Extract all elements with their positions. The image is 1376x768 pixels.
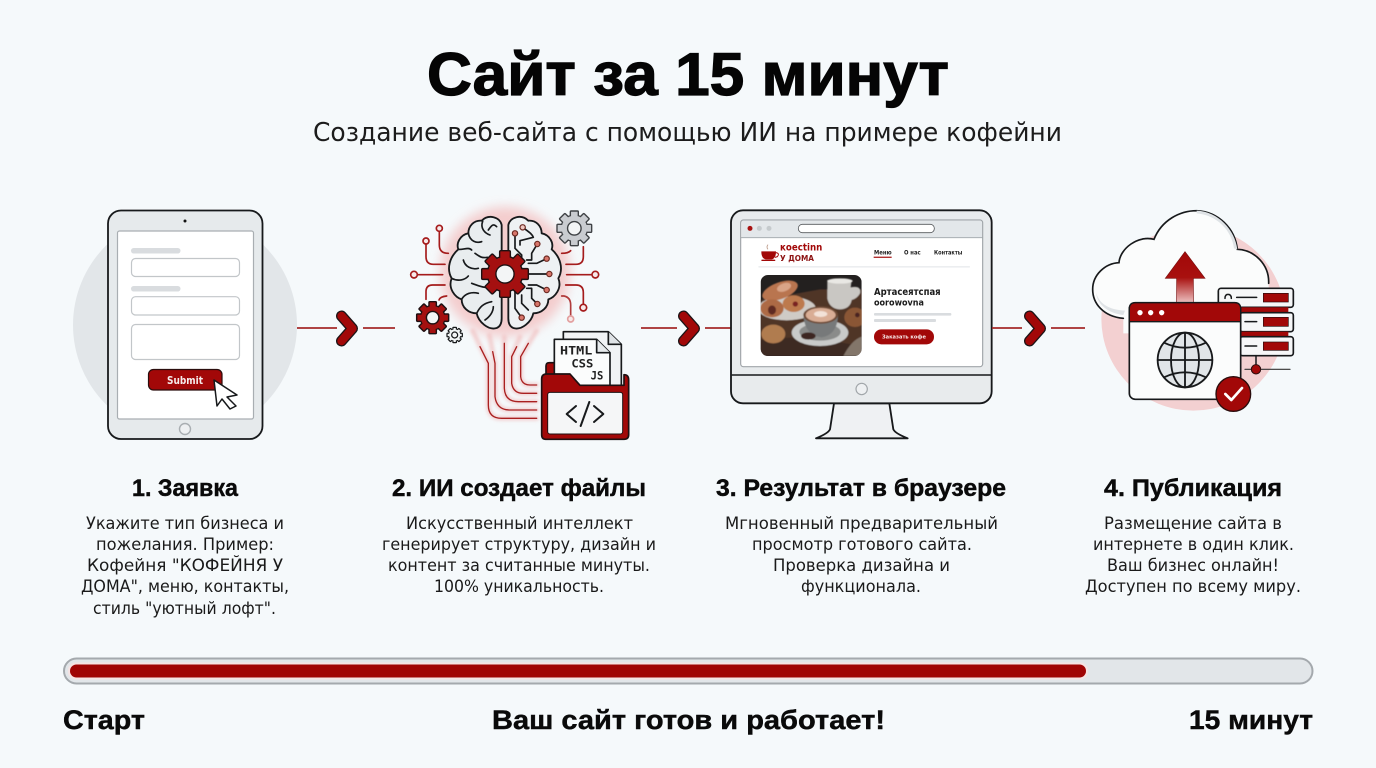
site navigation: О нас xyxy=(904,249,921,256)
brain glow xyxy=(440,207,570,337)
label: start: Старт xyxy=(63,705,145,735)
front document xyxy=(554,339,610,390)
progress bar xyxy=(64,658,1312,684)
arrow 1 xyxy=(297,316,395,341)
site headline: ооrоwоvnа xyxy=(874,298,924,308)
step 4 description: интернете в один клик. xyxy=(1093,535,1294,554)
browser window xyxy=(741,220,983,367)
file labels xyxy=(560,343,603,383)
file labels: JS xyxy=(591,369,603,383)
step 2 description xyxy=(382,514,656,596)
site navigation: Меню xyxy=(874,249,892,256)
gray gear xyxy=(557,211,592,246)
step 1 description: Укажите тип бизнеса и xyxy=(86,514,284,533)
step 1 description: ДОМА", меню, контакты, xyxy=(81,577,289,596)
title: Сайт за 15 минут xyxy=(427,41,949,108)
site logo: У ДОМА xyxy=(780,253,814,263)
arrow 3 xyxy=(992,316,1085,341)
icon: AI brain generating files xyxy=(411,207,629,439)
step 1 description xyxy=(81,514,289,618)
icon: tablet with form xyxy=(73,210,297,439)
step 4 description xyxy=(1085,514,1301,596)
step 4 description: Ваш бизнес онлайн! xyxy=(1107,556,1279,575)
step 2 description: 100% уникальность. xyxy=(434,577,604,596)
red gear xyxy=(417,302,449,334)
arrow 2 xyxy=(641,316,732,341)
back document xyxy=(563,332,621,390)
step 3 description xyxy=(725,514,998,596)
small outline gear xyxy=(447,327,462,343)
site button: Заказать кофе xyxy=(882,334,926,341)
step 3 description: Мгновенный предварительный xyxy=(725,514,998,533)
step 1 description: пожелания. Пример: xyxy=(96,535,274,554)
monitor stand xyxy=(816,403,908,438)
site navigation: Контакты xyxy=(934,249,963,256)
folder with code files xyxy=(542,332,629,439)
site headline: Артасеятспая xyxy=(874,287,941,298)
cloud xyxy=(1093,211,1269,333)
center gear xyxy=(482,251,528,297)
step 3 description: Проверка дизайна и xyxy=(773,556,950,575)
subtitle: Создание веб-сайта с помощью ИИ на примере кофейни xyxy=(313,118,1062,148)
step 2 heading: 2. ИИ создает файлы xyxy=(392,475,646,502)
left circuits xyxy=(411,225,448,300)
step 3 heading: 3. Результат в браузере xyxy=(716,475,1006,502)
icon: cursor xyxy=(214,380,237,409)
right circuits xyxy=(562,247,599,322)
folder front xyxy=(542,374,629,439)
site headline xyxy=(874,287,941,308)
browser window xyxy=(1129,303,1241,399)
step 1 description: Кофейня "КОФЕЙНЯ У xyxy=(87,556,283,575)
submit button xyxy=(148,370,222,390)
step 4 description: Размещение сайта в xyxy=(1104,514,1282,533)
site button xyxy=(874,329,934,344)
check badge xyxy=(1216,377,1251,411)
monitor body xyxy=(731,210,992,403)
step 3 description: функционала. xyxy=(801,577,921,596)
step 2 description: контент за считанные минуты. xyxy=(388,556,650,575)
globe xyxy=(1158,333,1212,387)
data streams xyxy=(473,331,537,418)
coffee and pastry photo xyxy=(758,275,866,356)
step 4 heading: 4. Публикация xyxy=(1104,475,1282,502)
site logo xyxy=(761,243,822,263)
step 4 description: Доступен по всему миру. xyxy=(1085,577,1301,596)
step 2 description: Искусственный интеллект xyxy=(406,514,633,533)
step 3 description: просмотр готового сайта. xyxy=(752,535,972,554)
site navigation xyxy=(874,249,963,258)
server stack xyxy=(1218,288,1293,374)
step 1 description: стиль "уютный лофт". xyxy=(93,599,276,618)
step 2 description: генерирует структуру, дизайн и xyxy=(382,535,656,554)
site logo: коеctinn xyxy=(780,243,822,254)
label: 15 minutes: 15 минут xyxy=(1189,705,1313,735)
icon: cloud publication xyxy=(1093,211,1293,411)
icon: monitor with website preview xyxy=(731,210,992,438)
brain xyxy=(449,217,561,328)
step 1 heading: 1. Заявка xyxy=(132,475,239,502)
file labels: CSS xyxy=(571,356,594,370)
submit button: Submit xyxy=(167,375,203,387)
upload arrow xyxy=(1165,252,1205,303)
label: site ready: Ваш сайт готов и работает! xyxy=(492,705,885,735)
file labels: HTML xyxy=(560,343,593,357)
